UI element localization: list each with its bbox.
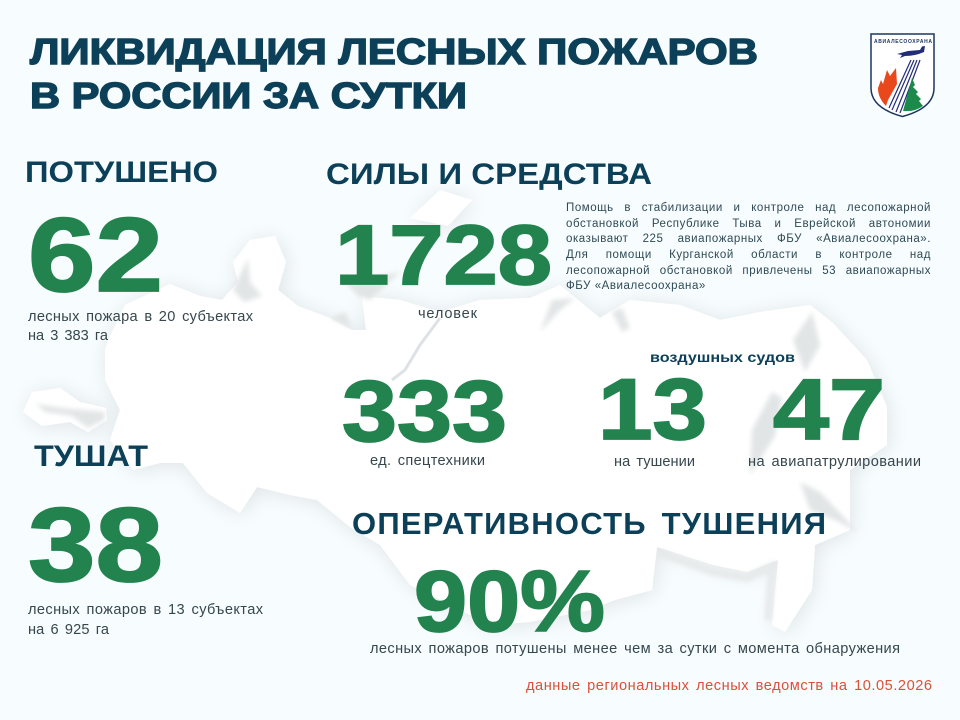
caption: 62 fires: на 3 383 га: [28, 328, 109, 344]
caption: 38 fires: на 6 925 га: [28, 622, 110, 638]
number: 38: 38: [28, 487, 163, 604]
source note: данные региональных лесных ведомств на 10.05.2026: [526, 678, 932, 694]
caption: firefighting: на тушении: [614, 454, 695, 470]
caption: air patrol: на авиапатрулировании: [748, 454, 921, 470]
number: 1728: 1728: [335, 208, 552, 302]
number: 90 percent: 90%: [414, 554, 605, 650]
logo: Avialesookhrana shield: [871, 34, 934, 116]
caption: special vehicles: ед. спецтехники: [370, 453, 485, 469]
number: 13: 13: [598, 362, 707, 458]
caption: 62 fires: [28, 309, 254, 344]
text block: aviation assistance: Для помощи Курганской области в контроле над: [566, 249, 931, 261]
caption: 38 fires: [28, 602, 264, 638]
text block: aviation assistance: лесопожарной обстановкой привлечены 53 авиапожарных: [566, 265, 931, 277]
main title: В РОССИИ ЗА СУТКИ: [30, 75, 467, 116]
number: 47: 47: [773, 362, 885, 458]
heading: forces and means: СИЛЫ И СРЕДСТВА: [326, 158, 652, 191]
caption: people: человек: [418, 306, 478, 322]
caption: 90 percent: лесных пожаров потушены менее чем за сутки с момента обнаружения: [370, 641, 900, 657]
heading: extinguished: ПОТУШЕНО: [25, 156, 218, 189]
logo: Avialesookhrana shield: АВИАЛЕСООХРАНА: [874, 39, 932, 45]
number: 62: 62: [28, 197, 163, 314]
text block: aviation assistance: [566, 202, 931, 292]
heading: aircraft: воздушных судов: [650, 349, 795, 365]
text block: aviation assistance: Помощь в стабилизации и контроле над лесопожарной: [566, 202, 931, 214]
heading: response speed: ОПЕРАТИВНОСТЬ ТУШЕНИЯ: [352, 506, 826, 541]
number: 333: 333: [342, 364, 507, 460]
map of Russia background: [23, 190, 887, 632]
main title: [30, 31, 758, 116]
caption: 38 fires: лесных пожаров в 13 субъектах: [28, 602, 264, 618]
caption: 62 fires: лесных пожара в 20 субъектах: [28, 309, 254, 325]
text block: aviation assistance: ФБУ «Авиалесоохрана»: [566, 280, 706, 292]
text block: aviation assistance: обстановкой Республике Тыва и Еврейской автономии: [566, 218, 931, 230]
heading: being extinguished: ТУШАТ: [34, 440, 148, 473]
text block: aviation assistance: оказывают 225 авиапожарных ФБУ «Авиалесоохрана».: [566, 233, 931, 245]
main title: ЛИКВИДАЦИЯ ЛЕСНЫХ ПОЖАРОВ: [30, 31, 758, 72]
